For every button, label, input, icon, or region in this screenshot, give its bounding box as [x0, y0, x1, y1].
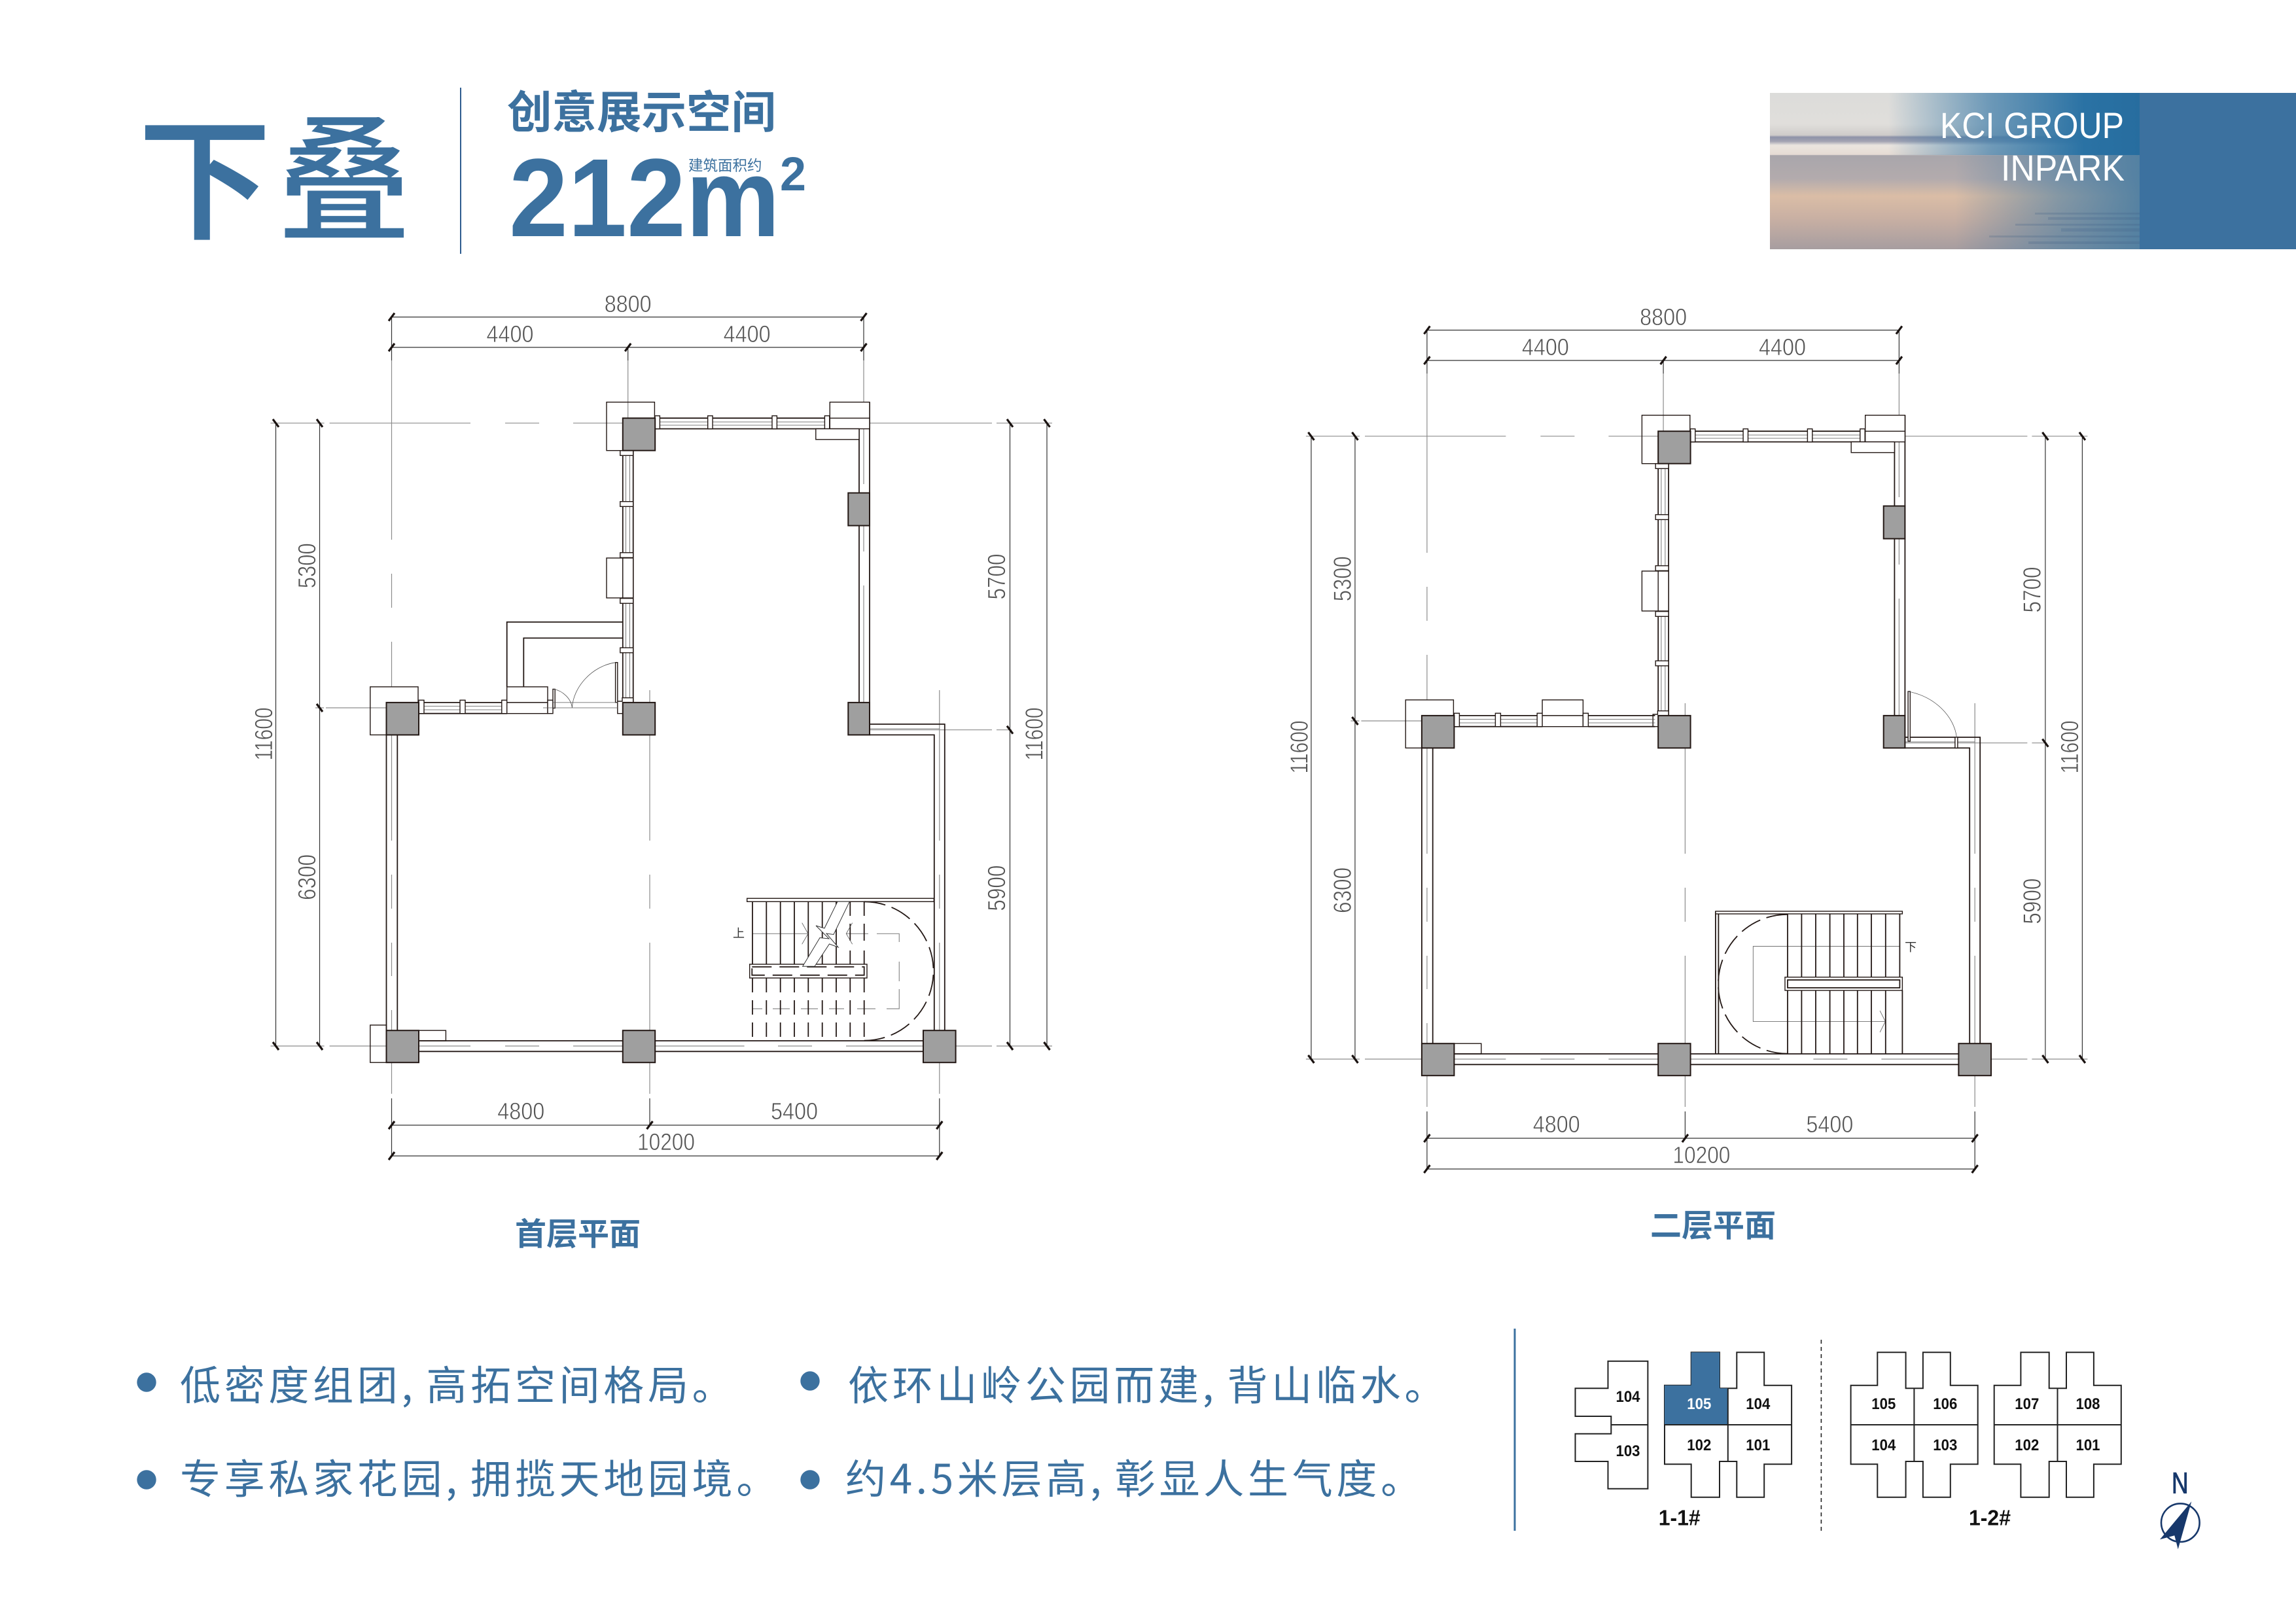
block A: 104 [1871, 1437, 1896, 1454]
walls [386, 402, 945, 1051]
dimension numbers: 5400 [771, 1098, 818, 1125]
dimension numbers: 4800 [497, 1098, 544, 1125]
feature list [137, 1353, 1449, 1505]
block B: 108 [2075, 1395, 2100, 1413]
key plan divider [1514, 1329, 1515, 1531]
dimension numbers: 5900 [983, 865, 1011, 911]
block A: 106 [1933, 1395, 1957, 1413]
block B: 102 [2015, 1437, 2039, 1454]
floor plan: second floor [1286, 304, 2087, 1173]
stair down [1716, 911, 1916, 1054]
block east: 104 [1746, 1395, 1771, 1413]
bullet: mountain park: 依环山岭公园而建,背山临水。 [848, 1353, 1449, 1412]
block east: 101 [1746, 1437, 1770, 1454]
dimension numbers: 5300 [294, 543, 321, 588]
block B: 101 [2075, 1437, 2100, 1454]
window posts [607, 402, 870, 714]
block A [1851, 1352, 1978, 1497]
key plan: building 1-2 [1851, 1352, 2121, 1530]
shared plan drawing [1286, 304, 2087, 1173]
dimension numbers: 5700 [983, 553, 1011, 599]
north arrow [2160, 1467, 2200, 1549]
bullet: floor height: 约4.5米层高,彰显人生气度。 [845, 1446, 1425, 1505]
highlighted unit 105 [1665, 1352, 1728, 1425]
block A: 105 [1871, 1395, 1896, 1413]
dimension numbers: 8800 [605, 290, 652, 317]
stair up [733, 898, 934, 1041]
dimension numbers: 11600 [1021, 708, 1049, 760]
logo text [1940, 105, 2125, 188]
block A: 103 [1933, 1437, 1957, 1454]
plan caption: ground floor: 首层平面 [515, 1208, 641, 1254]
dimension and shell shared drawing [251, 290, 1052, 1160]
dimension numbers: 11600 [251, 708, 278, 760]
title: 下叠: 下 [137, 73, 272, 268]
dimension numbers: 6300 [294, 854, 321, 900]
logo banner [1770, 93, 2296, 249]
dimension numbers: 4400 [487, 321, 534, 347]
north arrow: N [2172, 1467, 2188, 1500]
side-wing window [419, 703, 507, 714]
block east: 105 [1687, 1395, 1711, 1413]
block B: 107 [2015, 1395, 2039, 1413]
column surround outlines [370, 402, 654, 1041]
building label 1-2#: 1-2# [1969, 1506, 2011, 1530]
area figure: 212 m2: 2 [780, 148, 806, 201]
block west: 103 [1616, 1442, 1640, 1460]
stair up: 上 [733, 924, 745, 941]
block east [1665, 1352, 1792, 1497]
title: 下叠 [137, 73, 412, 268]
dimension numbers: 10200 [637, 1128, 695, 1155]
dimension numbers [251, 290, 1049, 1155]
banner photo strip [1770, 93, 2140, 249]
block west: 104 [1616, 1388, 1640, 1406]
floor plan: ground floor [251, 290, 1052, 1160]
subtitle: 创意展示空间: 创意展示空间 [507, 77, 776, 141]
block east: 102 [1687, 1437, 1711, 1454]
plan caption: second floor: 二层平面 [1650, 1200, 1776, 1246]
side-wing window continuation [1588, 716, 1655, 727]
bullet: low density: 低密度组团,高拓空间格局。 [180, 1353, 736, 1412]
key plan: building 1-1 [1576, 1352, 1792, 1530]
structural columns [386, 418, 956, 1062]
key plan separator [1820, 1340, 1822, 1531]
area figure: 212 m2: 212m [509, 136, 780, 260]
banner blue block [2140, 93, 2296, 249]
logo text: KCI GROUP [1940, 105, 2124, 146]
block west [1576, 1361, 1648, 1489]
entry bracket wall [507, 622, 623, 687]
balcony door [1908, 691, 1958, 748]
header divider [460, 88, 461, 254]
block B [1994, 1352, 2121, 1497]
title: 下叠: 叠 [277, 73, 412, 268]
west pier outline [370, 1025, 386, 1062]
dimension numbers: 4400 [724, 321, 771, 347]
bullet: private garden: 专享私家花园,拥揽天地园境。 [180, 1446, 781, 1505]
building label 1-1#: 1-1# [1659, 1506, 1701, 1530]
logo text: INPARK [2001, 147, 2125, 188]
stair down: 下 [1905, 938, 1916, 955]
area figure: 212 m2: 建筑面积约 [688, 154, 762, 175]
entrance doors [543, 663, 618, 708]
